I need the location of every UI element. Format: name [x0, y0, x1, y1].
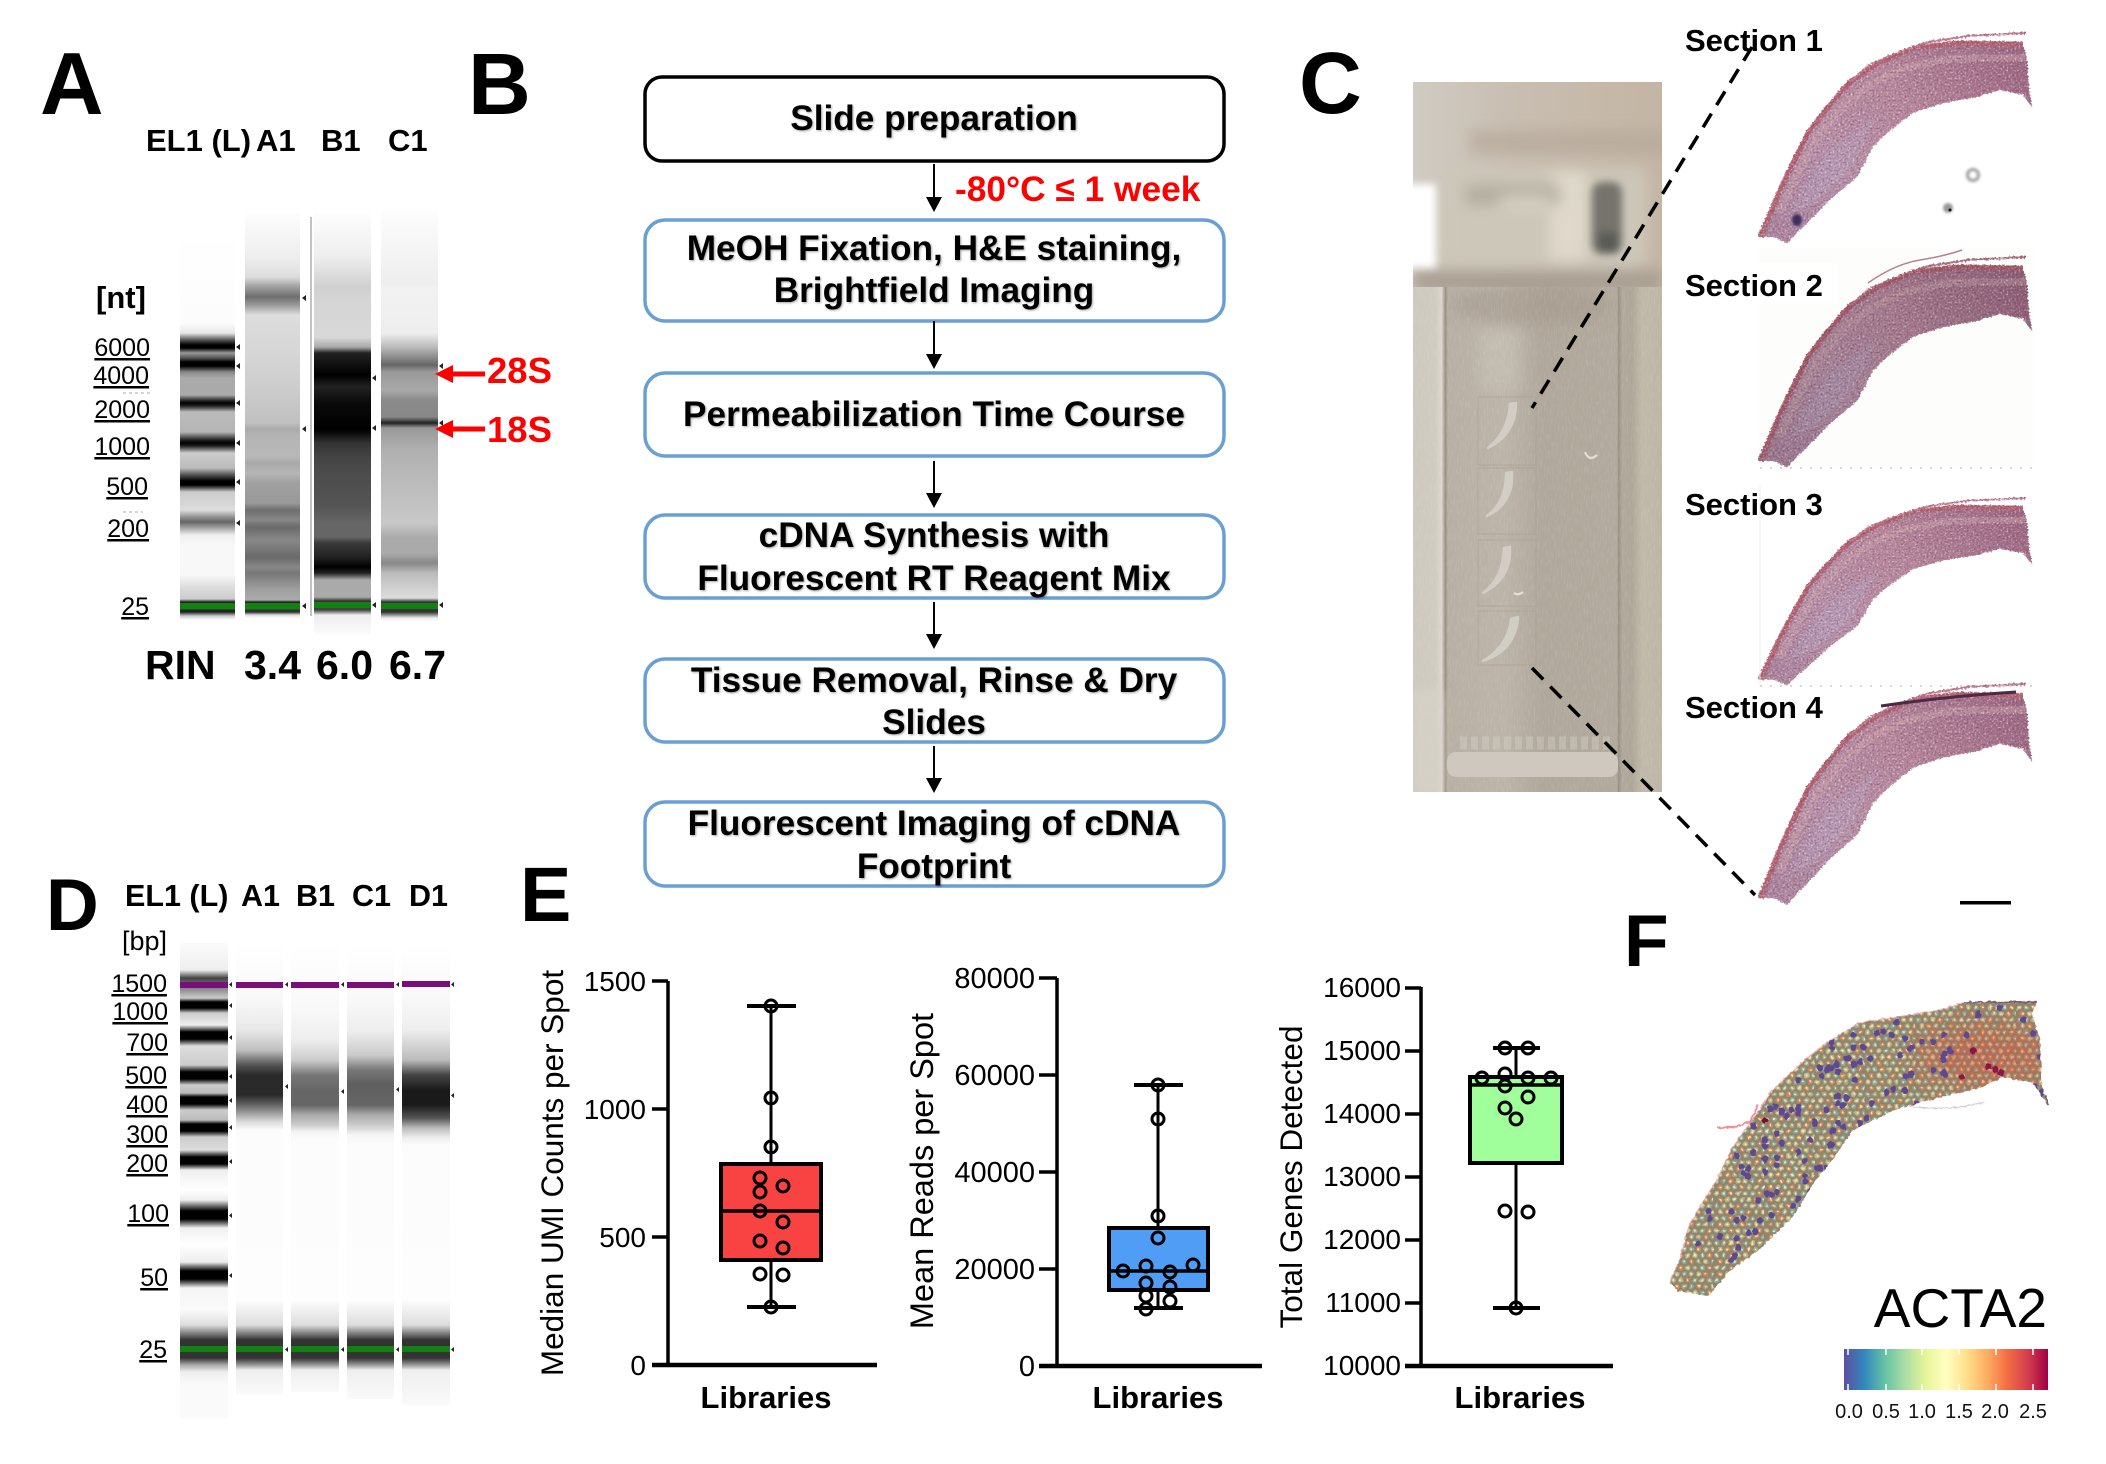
- letter B: B: [468, 36, 531, 133]
- high expression region: [1915, 1025, 2055, 1085]
- section 4 tissue: [1760, 684, 2032, 904]
- size ladder labels: 500: [125, 1062, 167, 1090]
- y tick labels: 1000: [584, 1094, 646, 1125]
- tissue outline and loose fragments: [1670, 1002, 2048, 1282]
- x label: Libraries: [701, 1380, 831, 1415]
- y axis title: Median UMI Counts per Spot: [534, 970, 570, 1376]
- lane C1: [347, 945, 394, 1399]
- section 2 background: [1759, 248, 2033, 468]
- lane headers: A1: [241, 879, 280, 913]
- letter F: F: [1624, 901, 1669, 982]
- y tick labels: 0: [1019, 1351, 1035, 1383]
- letter D: D: [46, 865, 99, 946]
- step: tissue removal: Tissue Removal, Rinse & Dry: [691, 661, 1178, 700]
- ladder lane: [180, 230, 235, 621]
- lane B1: [291, 945, 339, 1392]
- colour bar scale: 1.0: [1908, 1401, 1936, 1423]
- arrow 28S: 28S: [487, 350, 552, 391]
- lane A1: [236, 945, 283, 1395]
- y tick labels: 11000: [1325, 1287, 1401, 1318]
- section labels: Section 1: [1685, 23, 1823, 58]
- arrow with storage condition: -80°C ≤ 1 week: [955, 170, 1201, 209]
- size ladder labels: 200: [107, 515, 149, 543]
- step: fixation: MeOH Fixation, H&E staining,: [687, 229, 1181, 268]
- gene name: ACTA2: [1874, 1277, 2047, 1339]
- axes and ticks: [652, 981, 877, 1367]
- section labels: Section 2: [1685, 268, 1823, 303]
- data points: [754, 1000, 789, 1313]
- y tick labels: [954, 963, 1035, 1383]
- letter E: E: [520, 852, 571, 938]
- size ladder labels: 50: [140, 1264, 168, 1292]
- data points: [1117, 1079, 1199, 1315]
- section 3 tissue: [1760, 498, 2032, 685]
- step: fixation: [645, 220, 1224, 321]
- box: [721, 1006, 821, 1307]
- panel B: workflow: [468, 36, 1224, 886]
- step: permeabilization: Permeabilization Time Course: [683, 395, 1185, 434]
- colour bar scale: 0.5: [1872, 1401, 1900, 1423]
- step: cDNA synthesis: [645, 515, 1224, 598]
- letter C: C: [1299, 35, 1362, 132]
- data points: [1476, 1042, 1557, 1314]
- RIN values: [145, 642, 446, 688]
- y tick labels: 16000: [1323, 972, 1401, 1003]
- panel F: spatial expression map: [1624, 901, 2055, 1423]
- y tick labels: [1323, 972, 1401, 1381]
- chart: total genes: [1273, 972, 1613, 1415]
- lane B1: [314, 213, 371, 634]
- box: [1470, 1048, 1562, 1308]
- size ladder labels: [93, 334, 150, 621]
- arrow 28S: [435, 350, 552, 391]
- low expression spots, upper left: [1737, 1035, 1855, 1182]
- lane headers: A1: [256, 123, 296, 158]
- colour bar scale: 1.5: [1945, 1401, 1973, 1423]
- section labels: [1680, 23, 1837, 725]
- RIN values: 6.7: [389, 642, 446, 688]
- ladder lane: [180, 943, 228, 1418]
- lane headers: C1: [352, 879, 391, 913]
- step: permeabilization: [645, 373, 1224, 456]
- size ladder labels: 500: [106, 473, 148, 501]
- unit label nt: [nt]: [96, 280, 146, 315]
- step: cDNA synthesis: Fluorescent RT Reagent Mix: [697, 559, 1171, 598]
- section 1 tissue: [1760, 33, 2032, 243]
- step: tissue removal: Slides: [882, 703, 986, 742]
- lane headers: B1: [321, 123, 361, 158]
- y axis title: Total Genes Detected: [1273, 1026, 1309, 1328]
- dashed zoom lines: [1532, 47, 1755, 895]
- y tick labels: 0: [630, 1350, 646, 1381]
- size ladder labels: 25: [121, 593, 149, 621]
- arrow: [926, 602, 942, 649]
- y axis title: Mean Reads per Spot: [904, 1013, 940, 1329]
- x label: Libraries: [1455, 1380, 1585, 1415]
- size ladder labels: 300: [126, 1121, 168, 1149]
- letter A: A: [40, 34, 104, 133]
- y tick labels: 500: [599, 1222, 646, 1253]
- scale bar: [1960, 901, 2011, 904]
- panel E: box plots: [520, 852, 1613, 1415]
- size ladder labels: 1500: [111, 970, 167, 998]
- lane headers: D1: [409, 879, 448, 913]
- lane D1: [402, 945, 450, 1405]
- lane headers: C1: [388, 123, 428, 158]
- y tick labels: 13000: [1323, 1161, 1401, 1192]
- colour bar: [1844, 1349, 2048, 1390]
- axes and ticks: [1039, 978, 1262, 1368]
- y tick labels: 60000: [954, 1060, 1035, 1092]
- green marker bands: [180, 602, 438, 610]
- step: tissue removal: [645, 659, 1224, 742]
- debris spots: [1943, 170, 1978, 213]
- colour bar scale: 0.0: [1835, 1401, 1863, 1423]
- size ladder labels: 6000: [94, 334, 150, 362]
- y tick labels: 20000: [954, 1254, 1035, 1286]
- arrow: [926, 461, 942, 508]
- size ladder labels: 2000: [94, 396, 150, 424]
- y tick labels: 12000: [1323, 1224, 1401, 1255]
- panel A: RNA gel: [40, 34, 552, 688]
- size ladder labels: 700: [126, 1029, 168, 1057]
- RIN values: RIN: [145, 642, 216, 688]
- chart: median UMI counts: [534, 966, 877, 1415]
- step: slide preparation: [645, 77, 1224, 161]
- axes and ticks: [1405, 987, 1613, 1368]
- step: fluorescent imaging: Fluorescent Imaging of cDNA: [688, 804, 1180, 843]
- RIN values: 6.0: [316, 642, 373, 688]
- size ladder labels: 200: [126, 1150, 168, 1178]
- arrow 18S: [435, 409, 552, 450]
- y tick labels: 40000: [954, 1157, 1035, 1189]
- low expression spots, right: [1905, 1008, 2040, 1103]
- colour bar scale: 2.0: [1981, 1401, 2009, 1423]
- section 1 dark nucleus: [1792, 214, 1802, 226]
- lane headers: [146, 123, 428, 158]
- lane A1: [245, 213, 300, 619]
- arrow: [926, 746, 942, 793]
- section labels: Section 4: [1685, 690, 1824, 725]
- size ladder labels: 25: [139, 1336, 167, 1364]
- slide photograph: [1413, 82, 1662, 792]
- band peak markers: [229, 982, 454, 1352]
- colour bar scale: [1835, 1401, 2047, 1423]
- step: slide preparation: Slide preparation: [790, 99, 1078, 138]
- y tick labels: 15000: [1323, 1035, 1401, 1066]
- step: fluorescent imaging: Footprint: [857, 847, 1011, 886]
- chart: mean reads: [904, 963, 1262, 1415]
- low expression spots, lower left: [1698, 1008, 2042, 1260]
- y tick labels: 80000: [954, 963, 1035, 995]
- step: fluorescent imaging: [645, 802, 1224, 886]
- band peak markers: [236, 295, 443, 609]
- lane headers: B1: [296, 879, 335, 913]
- purple marker bands: [180, 981, 450, 988]
- lane headers: [125, 879, 448, 913]
- RIN values: 3.4: [244, 642, 301, 688]
- lane headers: EL1 (L): [125, 879, 228, 913]
- size ladder labels: 4000: [93, 362, 149, 390]
- step: fixation: Brightfield Imaging: [774, 271, 1094, 310]
- section 2 tissue: [1760, 257, 2032, 467]
- y tick labels: 1500: [584, 966, 646, 997]
- panel C: slide and sections: [1299, 23, 2035, 904]
- arrow: [926, 321, 942, 369]
- unit label bp: [bp]: [122, 926, 167, 956]
- green marker bands: [180, 1346, 450, 1352]
- colour bar scale: 2.5: [2019, 1401, 2047, 1423]
- box: [1109, 1085, 1208, 1308]
- size ladder labels: 1000: [94, 433, 150, 461]
- y tick labels: 10000: [1323, 1350, 1401, 1381]
- step: cDNA synthesis: cDNA Synthesis with: [759, 516, 1109, 555]
- y tick labels: 14000: [1323, 1098, 1401, 1129]
- size ladder labels: 100: [127, 1200, 169, 1228]
- x label: Libraries: [1093, 1380, 1223, 1415]
- size ladder labels: [111, 970, 169, 1364]
- section labels: Section 3: [1685, 487, 1823, 522]
- y tick labels: [584, 966, 646, 1381]
- lane headers: EL1 (L): [146, 123, 251, 158]
- expression spots: [1660, 1000, 2055, 1300]
- arrow 18S: 18S: [487, 409, 552, 450]
- lane C1: [381, 210, 438, 622]
- size ladder labels: 1000: [112, 998, 168, 1026]
- panel D: library gel: [46, 865, 454, 1418]
- size ladder labels: 400: [126, 1091, 168, 1119]
